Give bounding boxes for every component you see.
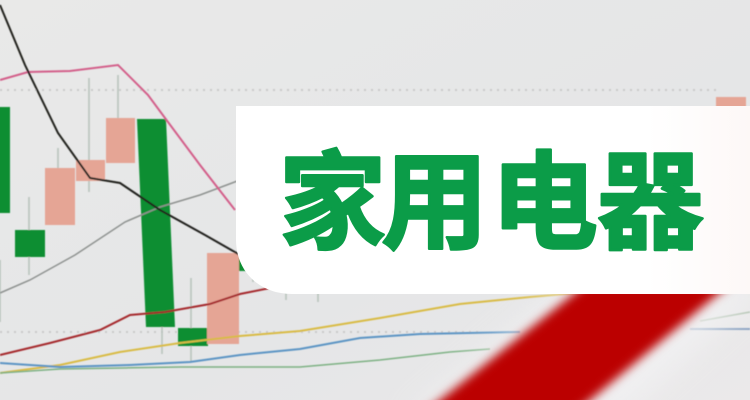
red blurred stroke	[425, 284, 730, 400]
red candles	[45, 97, 746, 344]
candle wicks	[0, 75, 318, 362]
green candles	[0, 107, 252, 346]
title: 家用电器	[279, 143, 704, 263]
moving average lines	[0, 160, 290, 293]
white title panel	[236, 106, 750, 294]
soft light halo beside red stroke	[405, 284, 750, 400]
